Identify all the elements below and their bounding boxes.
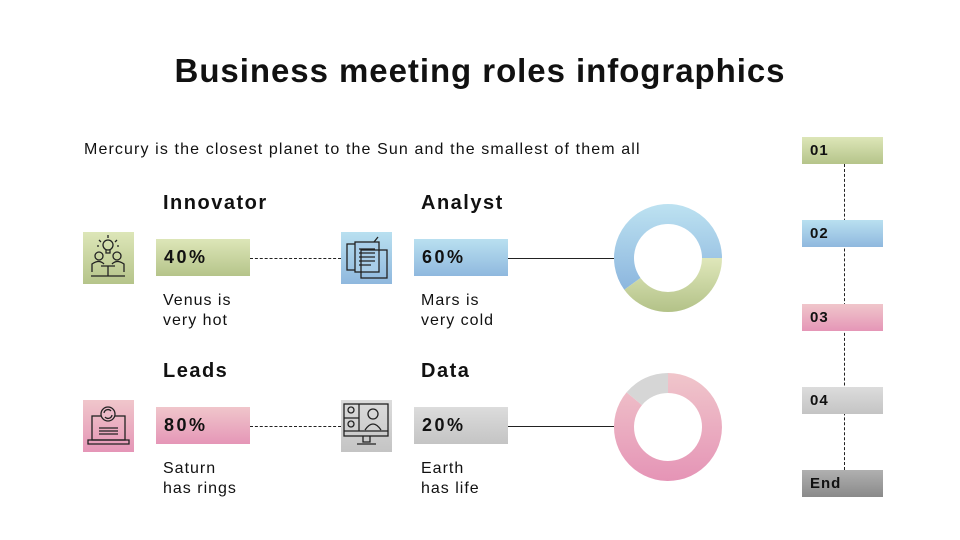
timeline step 04 bbox=[802, 387, 883, 414]
connector dashed 1 bbox=[250, 258, 341, 259]
connector solid 1 bbox=[508, 258, 614, 259]
bar: 40% bbox=[156, 239, 250, 276]
connector solid 2 bbox=[508, 426, 614, 427]
heading: Innovator: Innovator bbox=[163, 192, 268, 214]
heading: Data: Data bbox=[421, 360, 470, 382]
timeline step End: End bbox=[810, 475, 841, 492]
text: Venus bbox=[163, 292, 231, 329]
bar: 60%: 60% bbox=[422, 247, 466, 267]
bar: 20%: 20% bbox=[422, 415, 466, 435]
title: Business meeting roles infographics bbox=[175, 52, 785, 89]
subtitle: Mercury is the closest planet to the Sun and the smallest of them all bbox=[84, 141, 641, 158]
timeline dashed line bbox=[844, 164, 845, 470]
text: Saturn: Saturn bbox=[163, 460, 216, 477]
bar: 80% bbox=[156, 407, 250, 444]
text: Mars bbox=[421, 292, 494, 329]
bar: 20% bbox=[414, 407, 508, 444]
text: Saturn bbox=[163, 460, 237, 497]
icon: data bbox=[341, 400, 392, 452]
timeline step 01: 01 bbox=[810, 142, 829, 159]
timeline step 02 bbox=[802, 220, 883, 247]
icon: analyst bbox=[341, 232, 392, 284]
text: Mars: Mars is bbox=[421, 292, 480, 309]
timeline step 03 bbox=[802, 304, 883, 331]
bar: 80%: 80% bbox=[164, 415, 208, 435]
donut: data bbox=[614, 373, 722, 481]
text: Venus: very hot bbox=[163, 312, 228, 329]
bar: 40%: 40% bbox=[164, 247, 208, 267]
text: Mars: very cold bbox=[421, 312, 494, 329]
text: Saturn: has rings bbox=[163, 480, 237, 497]
donut: analyst bbox=[614, 204, 722, 312]
text: Earth: Earth bbox=[421, 460, 464, 477]
icon: innovator bbox=[83, 232, 134, 284]
timeline step 03: 03 bbox=[810, 309, 829, 326]
timeline step End bbox=[802, 470, 883, 497]
icon: leads bbox=[83, 400, 134, 452]
heading: Analyst: Analyst bbox=[421, 192, 504, 214]
timeline step 02: 02 bbox=[810, 225, 829, 242]
timeline step 04: 04 bbox=[810, 392, 829, 409]
connector dashed 2 bbox=[250, 426, 341, 427]
heading: Leads: Leads bbox=[163, 360, 228, 382]
timeline step 01 bbox=[802, 137, 883, 164]
text: Venus: Venus is bbox=[163, 292, 231, 309]
text: Earth: has life bbox=[421, 480, 480, 497]
bar: 60% bbox=[414, 239, 508, 276]
text: Earth bbox=[421, 460, 480, 497]
